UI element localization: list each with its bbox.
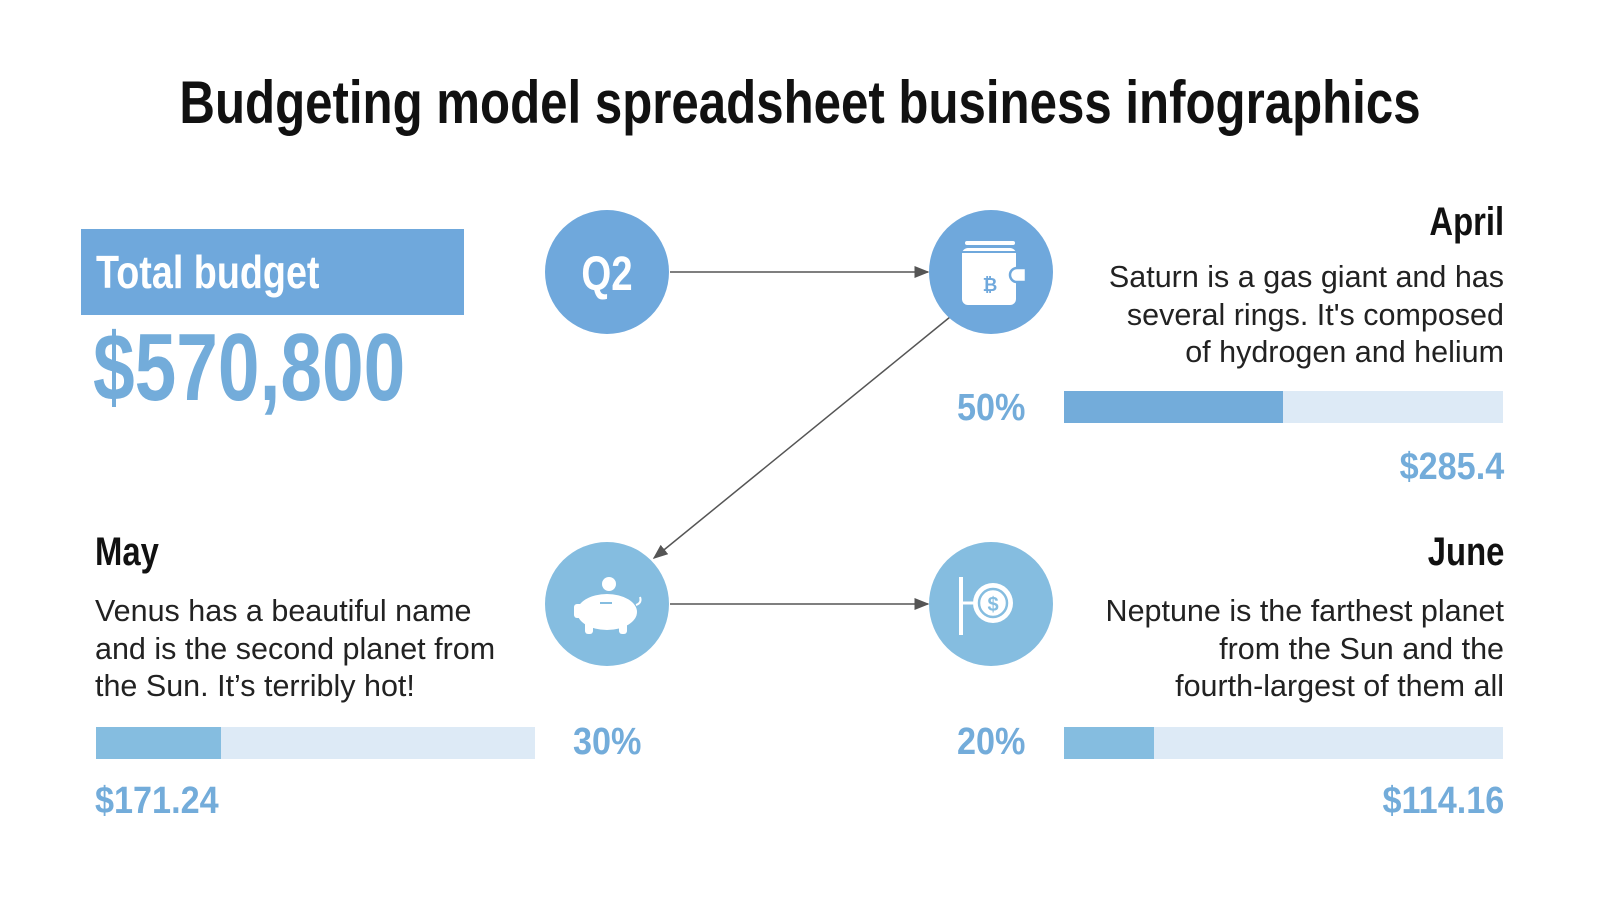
text: April: Saturn is a gas giant and has: [1109, 260, 1504, 294]
total budget label: [81, 229, 464, 315]
panel: April: [1109, 200, 1504, 488]
icon: piggy bank: [545, 542, 669, 666]
value: May: $171.24: [95, 780, 219, 822]
icon: coin sign: $: [987, 594, 999, 616]
bar: May: [96, 727, 535, 759]
title: Budgeting model spreadsheet business infographics: [179, 69, 1421, 136]
text: April: several rings. It's composed: [1127, 298, 1504, 332]
icon: wallet: [929, 210, 1053, 334]
value: April: $285.4: [1399, 446, 1504, 488]
heading: April: April: [1429, 200, 1504, 244]
percent: 50%: 50%: [957, 387, 1025, 429]
circle: Q2: [545, 210, 669, 334]
heading: June: June: [1427, 530, 1504, 574]
text: June: Neptune is the farthest planet: [1106, 594, 1504, 628]
label text: Total budget: [96, 246, 319, 298]
arrow: Q2 to April: [670, 271, 928, 273]
icon: coin sign: [929, 542, 1053, 666]
arrow: April to May: [654, 317, 950, 558]
percent: 20%: 20%: [957, 721, 1025, 763]
heading: May: May: [95, 530, 159, 574]
text: May: and is the second planet from: [95, 632, 495, 666]
bar: June: [1064, 727, 1503, 759]
panel: June: [1106, 530, 1504, 822]
text: May: Venus has a beautiful name: [95, 594, 471, 628]
percent: 30%: 30%: [573, 721, 641, 763]
text: June: fourth-largest of them all: [1175, 669, 1504, 703]
total budget value: $570,800: [93, 314, 405, 421]
icon: wallet: ₿: [983, 275, 997, 295]
circle: Q2: Q2: [581, 248, 633, 301]
bar: April: [1064, 391, 1503, 423]
text: May: the Sun. It’s terribly hot!: [95, 669, 415, 703]
text: April: [1109, 260, 1504, 369]
arrow: May to June: [670, 603, 928, 605]
panel: May: [95, 530, 495, 822]
text: June: from the Sun and the: [1219, 632, 1504, 666]
text: June: [1106, 594, 1504, 703]
value: June: $114.16: [1382, 780, 1504, 822]
text: April: of hydrogen and helium: [1185, 335, 1504, 369]
text: May: [95, 594, 495, 703]
